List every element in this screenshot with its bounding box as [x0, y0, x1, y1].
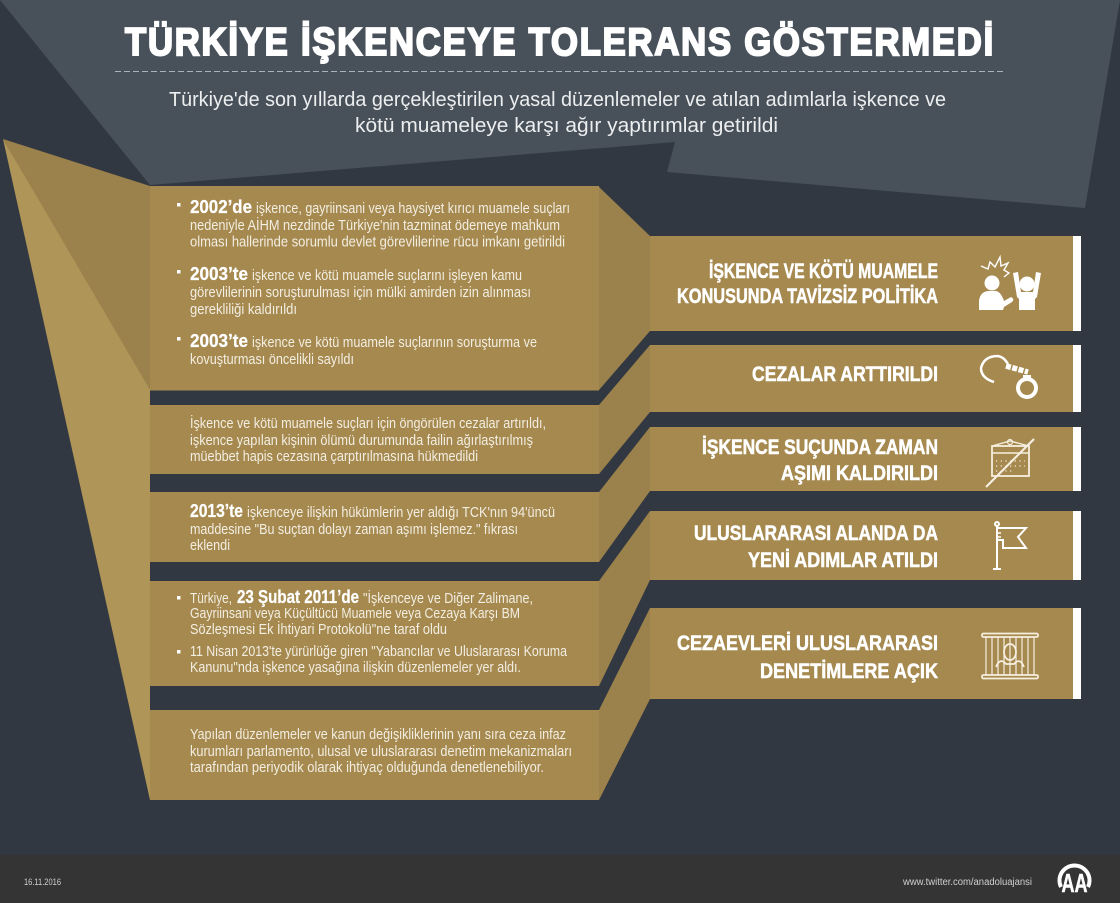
- panel: 2002-2003 measures: [150, 186, 599, 390]
- title: TÜRKİYE İŞKENCEYE TOLERANS GÖSTERMEDİ: [125, 21, 995, 64]
- bar: uncompromising policy: İŞKENCE VE KÖTÜ MUAMELE: [709, 260, 938, 283]
- panel: increased penalties text: işkence yapılan kişinin ölümü durumunda failin ağırlaştırılmış: [190, 433, 533, 449]
- subtitle: kötü muameleye karşı ağır yaptırımlar getirildi: [355, 115, 778, 137]
- bar: statute of limitations removed: AŞIMI KALDIRILDI: [781, 462, 938, 485]
- icon: flag: [993, 522, 1026, 569]
- bullet list: 2002 and 2003 items: işkence ve kötü muamele suçlarının soruşturma ve: [252, 335, 537, 351]
- bar: uncompromising policy: [650, 236, 1081, 331]
- bullet list: 2002 and 2003 items: 2002’de: [190, 196, 252, 217]
- icon: Anadolu Agency logo: [1060, 865, 1089, 898]
- panel: statute of limitations text: [150, 492, 599, 562]
- panel: prison inspections text: Yapılan düzenlemeler ve kanun değişikliklerinin yanı sıra ceza infaz: [190, 727, 566, 743]
- bullet list: 2002 and 2003 items: gerekliliği kaldırıldı: [190, 302, 297, 318]
- panel: international steps text: "İşkenceye ve Diğer Zalimane,: [363, 589, 533, 607]
- panel: international steps text: 11 Nisan 2013'te yürürlüğe giren "Yabancılar ve Uluslararası Koruma: [190, 644, 568, 660]
- icon: handcuffs: [981, 356, 1036, 397]
- icon: crossed calendar: [986, 439, 1034, 487]
- panel: statute of limitations text: eklendi: [190, 538, 230, 554]
- bullet list: 2002 and 2003 items: görevlilerinin soruşturulması için mülki amirden izin alınması: [190, 285, 531, 301]
- subtitle: [169, 89, 946, 137]
- bullet list: 2002 and 2003 items: işkence ve kötü muamele suçlarını işleyen kamu: [252, 268, 522, 284]
- bar: prisons open to inspection: DENETİMLERE AÇIK: [760, 660, 938, 683]
- connectors between text panels and headline bars: [598, 186, 650, 800]
- bullet list: 2002 and 2003 items: 2003’te: [190, 263, 248, 284]
- bar: prisons open to inspection: [650, 608, 1081, 699]
- subtitle: Türkiye'de son yıllarda gerçekleştirilen yasal düzenlemeler ve atılan adımlarla işkence ve: [169, 89, 946, 111]
- bullet list: 2002 and 2003 items: olması hallerinde sorumlu devlet görevlilerine rücu imkanı getirildi: [190, 234, 565, 250]
- bullet list: 2002 and 2003 items: [177, 196, 570, 368]
- panel: international steps text: Gayriinsani veya Küçültücü Muamele veya Cezaya Karşı BM: [190, 606, 520, 622]
- panel: international steps text: Türkiye,: [190, 591, 232, 607]
- panel: prison inspections text: tarafından periyodik olarak ihtiyaç olduğunda denetlenebiliyor.: [190, 760, 544, 776]
- bullet list: 2002 and 2003 items: işkence, gayriinsani veya haysiyet kırıcı muamele suçları: [256, 201, 570, 217]
- panel: increased penalties text: müebbet hapis cezasına çarptırılmasına hükmedildi: [190, 449, 478, 465]
- panel: increased penalties text: İşkence ve kötü muamele suçları için öngörülen cezalar artırıldı,: [190, 414, 546, 432]
- bar: statute of limitations removed: İŞKENCE SUÇUNDA ZAMAN: [702, 436, 938, 459]
- panel: increased penalties text: [150, 405, 599, 474]
- website address: www.twitter.com/anadoluajansi: [902, 877, 1032, 888]
- date: 16.11.2016: [24, 877, 61, 888]
- panel: header background: [0, 0, 1120, 208]
- panel: prison inspections text: kurumları parlamento, ulusal ve uluslararası denetim mekanizmaları: [190, 744, 572, 760]
- icon: prison cage: [982, 634, 1038, 678]
- footer band: [0, 855, 1120, 903]
- bar: statute of limitations removed: [650, 427, 1081, 491]
- bar: penalties increased: CEZALAR ARTTIRILDI: [752, 363, 938, 386]
- panel: statute of limitations text: işkenceye ilişkin hükümlerin yer aldığı TCK'nın 94'üncü: [247, 505, 555, 521]
- panel: international steps text: [150, 581, 599, 686]
- funnel left wing: [3, 139, 150, 800]
- bar: international steps: [650, 511, 1081, 580]
- icon: torture scene: [979, 257, 1041, 310]
- bullet list: 2002 and 2003 items: 2003’te: [190, 330, 248, 351]
- panel: international steps text: Kanunu"nda işkence yasağına ilişkin düzenlemeler yer aldı.: [190, 660, 521, 676]
- bar: international steps: ULUSLARARASI ALANDA DA: [694, 522, 938, 545]
- panel: international steps text: 23 Şubat 2011’de: [237, 586, 359, 607]
- bar: international steps: YENİ ADIMLAR ATILDI: [748, 549, 938, 572]
- bar: penalties increased: [650, 345, 1081, 412]
- panel: prison inspections text: [150, 710, 599, 800]
- panel: international steps text: Sözleşmesi Ek İhtiyari Protokolü"ne taraf oldu: [190, 620, 447, 638]
- icon: Anadolu Agency logo: AA: [1062, 868, 1088, 898]
- panel: statute of limitations text: maddesine "Bu suçtan dolayı zaman aşımı işlemez." fıkrası: [190, 522, 518, 538]
- bullet list: 2002 and 2003 items: nedeniyle AİHM nezdinde Türkiye'nin tazminat ödemeye mahkum: [190, 216, 560, 234]
- panel: statute of limitations text: 2013’te: [190, 500, 243, 521]
- bar: uncompromising policy: KONUSUNDA TAVİZSİZ POLİTİKA: [677, 285, 938, 308]
- bar: prisons open to inspection: CEZAEVLERİ ULUSLARARASI: [677, 632, 938, 655]
- bullet list: 2002 and 2003 items: kovuşturması öncelikli sayıldı: [190, 352, 354, 368]
